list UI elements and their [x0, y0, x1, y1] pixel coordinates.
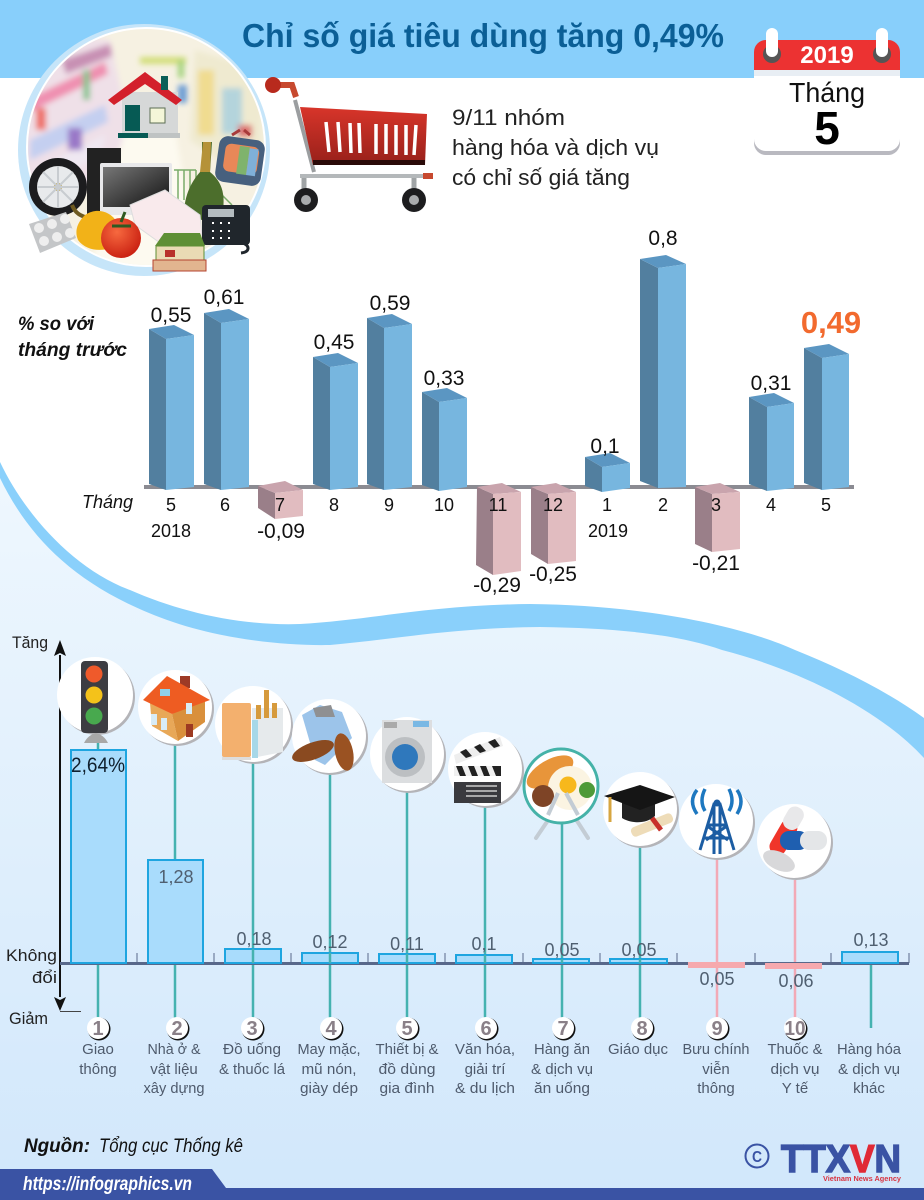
calendar: 2019	[800, 42, 854, 69]
category labels: gia đình	[380, 1080, 434, 1097]
group values: 0,05	[699, 969, 735, 989]
bars negative	[258, 481, 740, 575]
bar values: 0,33	[424, 367, 464, 390]
bar values: 0,61	[204, 286, 244, 309]
number badges: 2	[171, 1018, 183, 1040]
logo TTXVN: Vietnam News Agency	[823, 1176, 901, 1183]
group values: 0,05	[544, 940, 580, 960]
group values: 1,28	[158, 867, 194, 887]
number badges: 9	[711, 1018, 723, 1040]
icon: graduation cap	[603, 772, 679, 848]
category labels: Y tế	[782, 1080, 809, 1097]
month labels: 3	[711, 495, 721, 515]
number badges: 1	[92, 1018, 104, 1040]
month labels: 1	[602, 495, 612, 515]
chart axis label	[18, 314, 127, 361]
category labels: & du lịch	[455, 1080, 515, 1097]
month labels	[151, 495, 831, 541]
source: Tổng cục Thống kê	[99, 1136, 243, 1157]
title: Chỉ số giá tiêu dùng tăng 0,49%	[242, 17, 724, 54]
month labels: 5	[821, 495, 831, 515]
category labels: thông	[697, 1080, 735, 1097]
group values: 0,05	[621, 940, 657, 960]
number badges: 8	[636, 1018, 648, 1040]
supermarket photo	[28, 29, 264, 265]
category labels: Thiết bị &	[376, 1041, 438, 1058]
category labels: Văn hóa,	[455, 1041, 515, 1058]
illustration: consumer goods circle	[18, 20, 280, 280]
bar values: -0,09	[257, 520, 305, 543]
connector lines	[98, 732, 871, 1028]
icon: telephone	[202, 205, 250, 253]
bar values: 0,59	[370, 292, 410, 315]
category labels: thông	[79, 1061, 117, 1078]
group bar chart: 2,64%	[71, 754, 125, 777]
category labels: May mặc,	[298, 1041, 360, 1058]
icon: house	[108, 72, 182, 138]
month labels: 6	[220, 495, 230, 515]
category labels: ăn uống	[534, 1080, 590, 1097]
group values	[158, 867, 889, 991]
month labels: 7	[275, 495, 285, 515]
icon: tomato	[101, 212, 141, 258]
vertical axis	[6, 633, 81, 1028]
category labels: Bưu chính	[682, 1041, 750, 1058]
category labels: giải trí	[465, 1061, 506, 1078]
header band	[0, 0, 924, 78]
month axis title: Tháng	[82, 492, 133, 512]
wave band	[0, 400, 924, 758]
month labels: 12	[543, 495, 563, 515]
icon: book	[153, 233, 206, 271]
category labels: đồ dùng	[378, 1061, 436, 1078]
category labels: viễn	[702, 1061, 730, 1078]
icon: monitor	[100, 163, 172, 215]
calendar: Tháng	[789, 77, 865, 108]
source	[24, 1136, 243, 1157]
month labels: 2	[658, 495, 668, 515]
category labels: vật liệu	[150, 1061, 198, 1078]
icon: medicine pills	[757, 804, 833, 880]
bar values: 0,45	[314, 331, 354, 354]
footer band	[0, 1169, 924, 1200]
highlighted value: 0,49	[801, 305, 861, 340]
chart axis label: % so với	[18, 314, 95, 335]
icon: washing machine	[370, 717, 446, 793]
number badges: 3	[246, 1018, 258, 1040]
calendar	[754, 28, 900, 155]
icon: traffic light	[57, 657, 135, 743]
number badges: 4	[325, 1018, 337, 1040]
category labels: xây dựng	[144, 1080, 204, 1097]
category labels: giày dép	[300, 1080, 358, 1097]
category labels: Đồ uống	[223, 1041, 281, 1058]
month labels: 10	[434, 495, 454, 515]
icon: shopping cart	[265, 77, 433, 212]
month labels: 9	[384, 495, 394, 515]
month labels: 2019	[588, 521, 628, 541]
bar values: -0,21	[692, 552, 740, 575]
month labels: 8	[329, 495, 339, 515]
chart axis label: tháng trước	[18, 340, 127, 361]
icon: meal plate	[521, 749, 598, 838]
source: Nguồn:	[24, 1136, 90, 1157]
text: nine of eleven groups: 9/11 nhóm	[452, 105, 565, 130]
category labels: & thuốc lá	[219, 1061, 286, 1078]
bar values: 0,1	[590, 435, 620, 458]
icon: television	[214, 130, 266, 187]
month labels: 4	[766, 495, 776, 515]
number badges	[87, 1017, 808, 1040]
group bar chart	[60, 750, 909, 991]
group values: 0,13	[853, 930, 889, 950]
text: nine of eleven groups	[452, 105, 659, 190]
category labels: Nhà ở &	[148, 1041, 200, 1058]
group values: 0,1	[471, 934, 497, 954]
bars positive	[149, 255, 849, 492]
group values: 0,12	[312, 932, 348, 952]
number badges: 6	[480, 1018, 492, 1040]
logo TTXVN: TTXVN	[781, 1138, 901, 1181]
category labels: Giao	[82, 1041, 114, 1058]
icon: champagne bottle	[184, 142, 224, 225]
group values: 0,11	[390, 934, 424, 954]
category labels: dịch vụ	[770, 1061, 820, 1078]
group values: 0,18	[236, 929, 272, 949]
bar values: 0,8	[648, 227, 678, 250]
month labels: 2018	[151, 521, 191, 541]
icon: antenna tower	[679, 784, 755, 860]
category labels: khác	[853, 1080, 885, 1097]
icon: tire	[29, 158, 87, 216]
icon: pills	[29, 212, 76, 253]
vertical axis: Giảm	[9, 1009, 48, 1028]
month labels: 11	[489, 495, 507, 515]
category labels: mũ nón,	[302, 1061, 356, 1078]
bar values: -0,25	[529, 563, 577, 586]
calendar: 5	[814, 102, 840, 154]
number badges: 10	[784, 1018, 806, 1040]
footer band: https://infographics.vn	[23, 1174, 192, 1195]
category labels: & dịch vụ	[531, 1061, 593, 1078]
icon: drink and cigarettes	[215, 686, 293, 764]
text: nine of eleven groups: có chỉ số giá tăng	[452, 165, 630, 190]
background lower panel	[0, 440, 924, 1200]
icon: computer tower	[87, 148, 121, 214]
bar chart: monthly CPI	[82, 227, 861, 597]
group values: 0,06	[778, 971, 814, 991]
vertical axis: Không	[6, 946, 57, 965]
icon: clothes and shoes	[289, 699, 368, 775]
category labels: Hàng hóa	[837, 1041, 902, 1058]
icon: film clapperboard	[448, 732, 524, 808]
vertical axis: đổi	[32, 968, 57, 987]
category labels: Thuốc &	[768, 1041, 822, 1058]
icon: yellow pepper	[72, 205, 118, 250]
text: nine of eleven groups: hàng hóa và dịch vụ	[452, 135, 659, 160]
logo TTXVN: C	[752, 1149, 762, 1166]
category labels: Giáo dục	[608, 1041, 668, 1058]
number badges: 7	[557, 1018, 569, 1040]
icon: shirt	[130, 190, 202, 250]
bar values: 0,55	[151, 304, 191, 327]
vertical axis: Tăng	[12, 633, 48, 652]
icon: house	[138, 670, 214, 746]
bar values	[151, 227, 791, 597]
category labels: & dịch vụ	[838, 1061, 900, 1078]
bar values: -0,29	[473, 574, 521, 597]
wave white area	[0, 60, 924, 718]
bar values: 0,31	[751, 372, 791, 395]
number badges: 5	[401, 1018, 413, 1040]
category labels: Hàng ăn	[534, 1041, 590, 1058]
month labels: 5	[166, 495, 176, 515]
category labels	[79, 1041, 902, 1097]
icon: cart in photo	[174, 170, 232, 208]
